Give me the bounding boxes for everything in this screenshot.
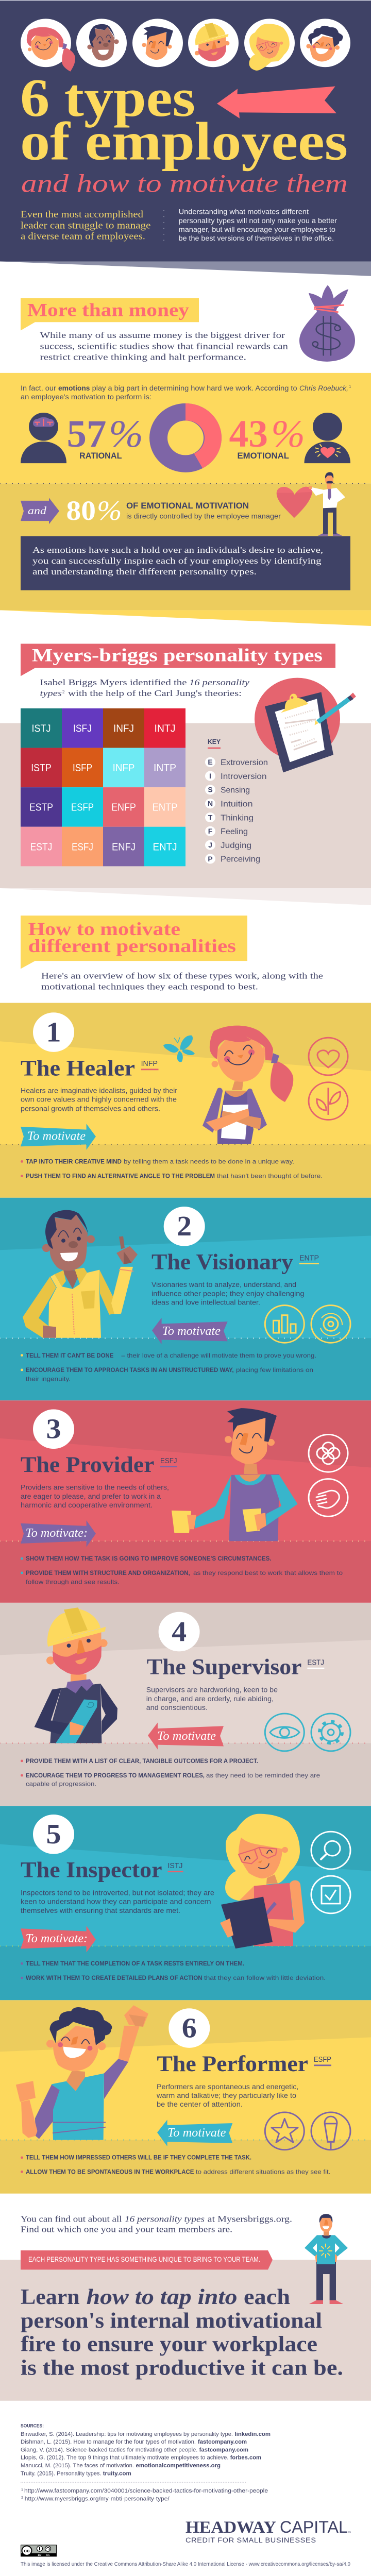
paragraph — [40, 330, 288, 362]
description — [156, 2083, 298, 2109]
panel: the supervisor — [0, 1603, 371, 1806]
motivation tips: ALLOW THEM TO BE SPONTANEOUS IN THE WORKPLACE — [26, 2168, 194, 2175]
panel: sources: linkedin.com — [235, 2431, 271, 2437]
heading: The Inspector — [21, 1857, 162, 1882]
stat: 57 percent rational — [67, 412, 143, 461]
paragraph: motivational techniques they each respond to best. — [41, 981, 258, 992]
number badge — [168, 2008, 210, 2048]
paragraph: success, scientific studies show that financial rewards can — [40, 341, 288, 351]
number badge: 6 — [182, 2012, 197, 2044]
motivation tips: ENCOURAGE THEM TO APPROACH TASKS IN AN UNSTRUCTURED WAY, — [26, 1366, 234, 1374]
closing statement: each — [244, 2285, 290, 2309]
number badge: 2 — [177, 1210, 192, 1242]
license badge: cc — [24, 2548, 30, 2554]
description: Inspectors tend to be introverted, but not isolated; they are — [21, 1889, 214, 1897]
icon: plant — [309, 1082, 348, 1120]
description: Providers are sensitive to the needs of others, — [21, 1484, 169, 1492]
panel: sources: truity.com — [103, 2470, 131, 2477]
personality grid: ESTP — [29, 802, 53, 814]
motivation tips: PROVIDE THEM WITH STRUCTURE AND ORGANIZATION, — [26, 1569, 190, 1577]
motivation tips — [21, 1158, 323, 1179]
icon: interlocked circles — [309, 1434, 348, 1472]
intro right text: be the best versions of themselves in the office. — [179, 234, 334, 243]
stat: 43 percent emotional: % — [271, 412, 305, 455]
paragraph: 16 personality — [189, 677, 249, 687]
number badge — [159, 1612, 200, 1651]
intro left text: leader can struggle to manage — [21, 221, 150, 231]
arrow: to motivate: To motivate — [157, 1730, 216, 1743]
intro text — [21, 384, 351, 401]
text: find out more: 16 personality types — [125, 2214, 205, 2224]
closing statement: how to tap into — [87, 2285, 237, 2309]
motivation tips: their ingenuity. — [26, 1376, 71, 1383]
motivation tips: that they can follow with little deviation. — [204, 1974, 326, 1981]
personality grid: ISFP — [73, 762, 92, 774]
panel: sources: Giang, V. (2014). Science-backed tactics for motivating other people. — [21, 2447, 197, 2453]
footnotes: 2 — [21, 2496, 23, 2500]
heading: ESFP — [314, 2056, 331, 2064]
legend: key: I — [209, 772, 211, 780]
heading — [21, 644, 335, 676]
arrow: to motivate — [21, 1124, 96, 1150]
arrow: and — [21, 498, 59, 524]
personality grid: INTJ — [155, 723, 176, 734]
description: warm and talkative; they particularly like to — [156, 2092, 296, 2100]
legend: key: Extroversion — [221, 758, 268, 767]
personality grid: ESFJ — [72, 841, 93, 853]
panel: sources: Manucci, M. (2015). The faces of motivation. — [21, 2462, 134, 2469]
arrow: to motivate — [21, 1520, 96, 1547]
paragraph: While many of us assume money is the biggest driver for — [40, 330, 285, 340]
heading: The Provider — [21, 1452, 154, 1477]
heading: Myers-briggs personality types — [32, 645, 323, 666]
license badge — [21, 2545, 57, 2557]
description: Visionaries want to analyze, understand, and — [151, 1281, 296, 1289]
personality grid: ENTP — [153, 802, 178, 814]
arrow: to motivate: To motivate: — [26, 1527, 88, 1540]
heading — [21, 916, 247, 969]
motivation tips — [21, 1352, 316, 1383]
description: personal growth of themselves and others. — [21, 1105, 160, 1113]
panel: the visionary — [0, 1198, 371, 1400]
motivation tips: TELL THEM IT CAN'T BE DONE — [26, 1352, 113, 1359]
character: healer — [203, 1026, 293, 1144]
legend: key: E — [208, 758, 213, 766]
number badge — [33, 1410, 74, 1449]
personality grid: ESFP — [71, 802, 94, 814]
intro right text — [179, 208, 337, 243]
paragraph: 2 — [62, 689, 65, 694]
intro text: an employee's motivation to perform is: — [21, 393, 151, 401]
description: influence other people; they enjoy challenging — [151, 1290, 304, 1298]
paragraph: Here's an overview of how six of these types work, along with the — [41, 971, 323, 980]
personality grid: ENFJ — [112, 841, 136, 853]
motivation tips — [21, 2154, 330, 2175]
stat: 80 percent: % — [97, 495, 122, 526]
legend: key: Introversion — [221, 772, 267, 781]
legend: key — [205, 738, 268, 864]
motivation tips: PUSH THEM TO FIND AN ALTERNATIVE ANGLE TO THE PROBLEM — [26, 1173, 215, 1179]
motivation tips: capable of progression. — [26, 1781, 96, 1788]
logo: headway capital: CREDIT FOR SMALL BUSINESSES — [185, 2536, 316, 2545]
icon: emotional person — [304, 413, 350, 463]
logo: headway capital: TM — [348, 2531, 351, 2533]
intro right text: personality types will not only make you a better — [179, 217, 337, 225]
description: Performers are spontaneous and energetic, — [157, 2083, 298, 2091]
personality grid: INFJ — [113, 723, 134, 734]
character: inspector — [220, 1814, 305, 1948]
paragraph: with the help of the Carl Jung's theories: — [68, 688, 242, 698]
license badge: SA — [46, 2554, 50, 2557]
heading: INFP — [141, 1060, 158, 1068]
intro right text: manager, but will encourage your employees to — [179, 226, 335, 234]
arrow: to motivate — [152, 1318, 228, 1344]
personality grid: ISTJ — [31, 723, 50, 734]
logo: headway capital: HEADWAY — [185, 2518, 276, 2537]
description — [21, 1484, 169, 1510]
motivation tips: SHOW THEM HOW THE TASK IS GOING TO IMPROVE SOMEONE'S CIRCUMSTANCES. — [26, 1555, 272, 1562]
description: Healers are imaginative idealists, guided by their — [21, 1087, 177, 1095]
panel: the inspector — [0, 1806, 371, 2000]
text: find out more: You can find out about all — [21, 2214, 122, 2224]
motivation tips: TAP INTO THEIR CREATIVE MIND — [26, 1158, 122, 1165]
heading: ESFJ — [160, 1457, 177, 1465]
description: own core values and highly concerned with the — [21, 1096, 177, 1104]
stat: 80 percent — [66, 495, 281, 526]
intro text: play a big part in determining how hard we work. According to — [92, 384, 297, 393]
personality grid: INFP — [113, 762, 134, 774]
arrow: to motivate: To motivate — [167, 2126, 226, 2140]
paragraph — [40, 677, 249, 698]
description: in charge, and are orderly, rule abiding, — [146, 1695, 274, 1703]
closing statement: is the most productive it can be. — [21, 2356, 343, 2380]
icon: star — [265, 2112, 304, 2150]
motivation tips: that hasn't been thought of before. — [217, 1173, 323, 1179]
paragraph: restrict creative thinking and halt performance. — [40, 352, 246, 362]
arrow: to motivate — [21, 1926, 96, 1952]
stat: 43 percent emotional — [229, 412, 305, 461]
wedge below header — [0, 261, 371, 276]
icon: eye — [265, 1714, 304, 1751]
icon: heart — [309, 1038, 348, 1075]
character: provider — [172, 1408, 298, 1541]
title: and how to motivate them — [21, 170, 348, 198]
arrow: to motivate: To motivate — [27, 1129, 86, 1143]
arrow: title ribbon — [217, 87, 336, 118]
stat: 57 percent rational: % — [109, 412, 143, 455]
portraits row — [21, 19, 350, 72]
title — [20, 68, 348, 198]
description: themselves with ensuring that standards are met. — [21, 1907, 180, 1915]
callout — [21, 536, 350, 590]
arrow: to motivate: To motivate: — [26, 1932, 88, 1945]
icon: bar chart — [265, 1306, 304, 1343]
personality grid: INTP — [154, 762, 176, 774]
heading: The Healer — [21, 1056, 135, 1080]
icon: money bag — [299, 285, 355, 362]
intro left text — [21, 210, 150, 242]
icon: gear — [311, 1714, 350, 1751]
legend: key: Sensing — [221, 786, 250, 795]
icon: checkbox — [311, 1876, 350, 1913]
panel: more than money — [21, 285, 355, 362]
motivation tips: – their love of a challenge will motivate them to prove you wrong. — [122, 1352, 316, 1359]
license badge: BY — [38, 2554, 42, 2557]
panel: the performer — [0, 2000, 371, 2194]
intro left text: a diverse team of employees. — [21, 231, 145, 242]
legend: key: N — [208, 800, 213, 807]
title: of employees — [20, 111, 348, 172]
description: Supervisors are hardworking, keen to be — [146, 1686, 278, 1694]
character: visionary — [23, 1210, 138, 1338]
heading: More than money — [27, 300, 189, 320]
icon: rational person — [21, 413, 66, 463]
icon: manager with heart — [277, 472, 345, 536]
legend: key: J — [208, 841, 212, 849]
heading: ESTJ — [307, 1659, 324, 1667]
footnotes: http://www.fastcompany.com/3040001/science-backed-tactics-for-motivating-other-people — [24, 2487, 268, 2494]
personality grid — [21, 708, 185, 866]
heading — [21, 298, 199, 331]
number badge: 4 — [172, 1616, 187, 1648]
callout: and understanding their different personality types. — [32, 566, 257, 577]
title: 6 types — [20, 68, 195, 128]
description: harmonic and cooperative environment. — [21, 1501, 153, 1510]
stat: 57 percent rational: RATIONAL — [79, 450, 122, 461]
panel: myers-briggs — [0, 644, 371, 905]
logo: headway capital: CAPITAL — [280, 2518, 348, 2537]
personality grid: ENFP — [111, 802, 136, 814]
arrow: and: and — [28, 505, 46, 517]
personality grid: ISTP — [31, 762, 52, 774]
icon: magnifier — [311, 1832, 350, 1869]
personality grid: ESTJ — [30, 841, 52, 853]
callout: As emotions have such a hold over an individual's desire to achieve, — [32, 545, 323, 555]
legend: key: S — [208, 786, 213, 794]
icon: target — [311, 1306, 350, 1343]
personality grid: ENTJ — [153, 841, 177, 853]
icon: clipboard — [255, 678, 356, 772]
motivation tips — [21, 1960, 326, 1981]
closing statement — [21, 2285, 343, 2380]
footnotes — [21, 2487, 268, 2502]
motivation tips: as they need to be reminded they are — [206, 1772, 320, 1779]
motivation tips: follow through and see results. — [26, 1579, 120, 1585]
legend: key: Intuition — [221, 800, 253, 808]
intro text: Chris Roebuck, — [299, 384, 348, 393]
intro text: 1 — [349, 384, 351, 389]
character: team member — [305, 2214, 348, 2304]
stat: 43 percent emotional: 43 — [229, 412, 268, 455]
paragraph: types — [40, 688, 62, 698]
number badge: 1 — [46, 1016, 61, 1048]
motivation tips: to address different situations as they see fit. — [196, 2168, 330, 2175]
text: find out more: Find out which one you and your team members are. — [21, 2224, 232, 2234]
stat: 57 percent rational: 57 — [67, 412, 106, 455]
icon: butterfly — [163, 1036, 195, 1062]
motivation tips: ENCOURAGE THEM TO PROGRESS TO MANAGEMENT ROLES, — [26, 1772, 205, 1779]
heading: The Visionary — [151, 1249, 293, 1274]
banner — [21, 2250, 273, 2269]
heading: How to motivate — [28, 919, 180, 939]
closing statement: person's internal motivational — [21, 2309, 322, 2333]
legend: key: Judging — [221, 841, 251, 850]
panel: sources — [21, 2424, 271, 2502]
motivation tips — [21, 1757, 320, 1788]
legend: key: Thinking — [221, 814, 254, 822]
banner: EACH PERSONALITY TYPE HAS SOMETHING UNIQUE TO BRING TO YOUR TEAM. — [28, 2256, 260, 2264]
arrow: to motivate: To motivate — [162, 1324, 221, 1338]
callout: you can successfully inspire each of your employees by identifying — [32, 555, 322, 566]
motivation tips: by telling them a task needs to be done in a unique way. — [124, 1158, 294, 1165]
panel: motivation statistics — [0, 373, 371, 626]
number badge — [33, 1012, 74, 1052]
footnotes: http://www.myersbriggs.org/my-mbti-personality-type/ — [25, 2496, 170, 2502]
legend: key: KEY — [208, 738, 221, 745]
footnotes: 1 — [21, 2488, 23, 2492]
paragraph: Isabel Briggs Myers identified the — [40, 677, 187, 687]
panel: the provider — [0, 1400, 371, 1603]
icon: hand — [309, 1479, 348, 1516]
personality grid: ISFJ — [73, 723, 92, 734]
motivation tips: placing few limitations on — [236, 1366, 313, 1374]
stat: 43 percent emotional: EMOTIONAL — [237, 450, 289, 461]
number badge — [164, 1207, 205, 1246]
description: are eager to please, and prefer to work in a — [21, 1493, 161, 1501]
donut chart — [159, 403, 222, 468]
motivation tips: TELL THEM HOW IMPRESSED OTHERS WILL BE IF THEY COMPLETE THE TASK. — [26, 2154, 251, 2161]
motivation tips: TELL THEM THAT THE COMPLETION OF A TASK RESTS ENTIRELY ON THEM. — [26, 1960, 244, 1967]
intro text: emotions — [58, 384, 90, 393]
stat: 80 percent: is directly controlled by the employee manager — [126, 513, 281, 521]
panel: sources: emotionalcompetitiveness.org — [136, 2462, 221, 2469]
closing statement: fire to ensure your workplace — [21, 2332, 317, 2356]
number badge: 3 — [46, 1413, 61, 1445]
stat: 80 percent: 80 — [66, 495, 96, 526]
heading: The Supervisor — [147, 1655, 301, 1679]
legend: key: P — [208, 855, 213, 863]
heading: The Performer — [157, 2052, 308, 2076]
panel: sources: fastcompany.com — [199, 2447, 248, 2453]
panel: sources: fastcompany.com — [198, 2438, 247, 2445]
heading: ENTP — [299, 1255, 319, 1262]
description: and conscientious. — [146, 1704, 208, 1712]
panel: how to motivate intro — [21, 916, 323, 992]
motivation tips: WORK WITH THEM TO CREATE DETAILED PLANS OF ACTION — [26, 1974, 203, 1981]
legend: key: T — [208, 814, 213, 821]
intro left text: Even the most accomplished — [21, 210, 143, 220]
motivation tips: PROVIDE THEM WITH A LIST OF CLEAR, TANGIBLE OUTCOMES FOR A PROJECT. — [26, 1757, 258, 1765]
text: find out more — [21, 2214, 292, 2234]
icon: microphone — [311, 2112, 350, 2150]
description: ideas and love intellectual banter. — [151, 1299, 260, 1307]
character: performer — [16, 2005, 148, 2140]
stat: 80 percent: OF EMOTIONAL MOTIVATION — [126, 501, 249, 511]
panel: sources: SOURCES: — [21, 2424, 44, 2428]
arrow: to motivate — [157, 2120, 232, 2146]
panel: sources: Truity. (2015). Personality types. — [21, 2470, 101, 2477]
number badge — [33, 1815, 74, 1854]
logo: headway capital — [185, 2518, 351, 2545]
text: find out more: at Mysersbriggs.org. — [208, 2214, 292, 2224]
panel: header — [0, 0, 371, 276]
description — [146, 1686, 278, 1712]
intro text: In fact, our — [21, 384, 56, 393]
motivation tips — [21, 1555, 343, 1585]
description: keen to understand how they can participate and concern — [21, 1898, 211, 1906]
heading: ISTJ — [168, 1862, 182, 1870]
heading: different personalities — [28, 936, 236, 956]
panel: sources: Dishman, L. (2015). How to manage for the four types of motivation. — [21, 2438, 196, 2445]
legend: key: Feeling — [221, 827, 248, 836]
legend: key: Perceiving — [221, 855, 260, 864]
description — [21, 1889, 214, 1915]
motivation tips: as they respond best to work that allows them to — [193, 1569, 343, 1577]
closing statement: Learn — [21, 2285, 80, 2309]
panel: sources: Llopis, G. (2012). The top 9 things that ultimately motivate employees to achieve. — [21, 2454, 229, 2461]
description: be the center of attention. — [157, 2100, 243, 2109]
panel: the healer — [0, 1003, 371, 1198]
description — [151, 1281, 304, 1307]
description — [21, 1087, 177, 1113]
character: supervisor — [35, 1607, 117, 1743]
arrow: to motivate — [148, 1723, 224, 1750]
paragraph — [41, 971, 323, 992]
number badge: 5 — [46, 1818, 61, 1850]
panel: sources: Birwadker, S. (2014). Leadership: tips for motivating employees by personality type. — [21, 2431, 233, 2437]
panel: sources: forbes.com — [230, 2454, 261, 2461]
panel: conclusion — [0, 2214, 371, 2401]
intro right text: Understanding what motivates different — [179, 208, 309, 216]
legend: key: F — [208, 827, 212, 835]
